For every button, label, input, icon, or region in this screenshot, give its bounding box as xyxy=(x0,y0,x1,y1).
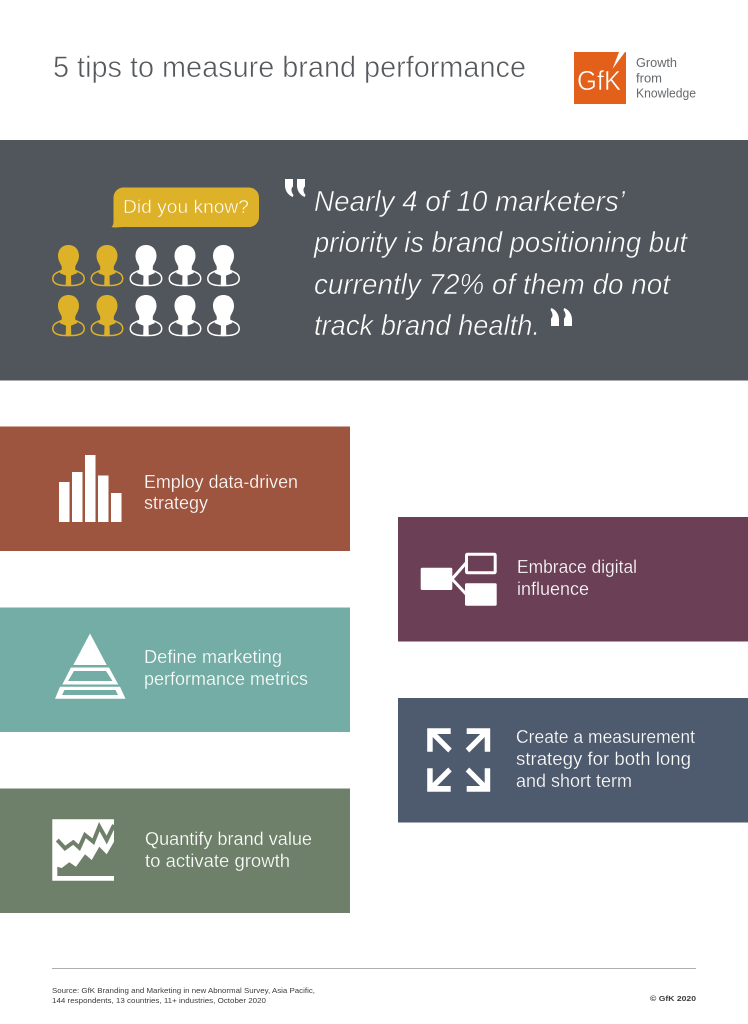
icon: pyramid xyxy=(55,634,126,699)
panel: did you know banner xyxy=(0,140,748,380)
panel: define marketing performance metrics xyxy=(0,608,350,732)
tip text xyxy=(517,557,637,599)
tip text: and short term xyxy=(516,771,632,791)
speech bubble: did you know: Did you know? xyxy=(123,197,249,217)
panel: employ data-driven strategy xyxy=(0,426,350,551)
source note xyxy=(52,986,315,1005)
panel: quantify brand value xyxy=(0,788,350,913)
panel: embrace digital influence xyxy=(398,517,748,642)
logo tagline: Knowledge xyxy=(636,86,696,100)
logo tagline: Growth xyxy=(636,56,677,70)
quote text: priority is brand positioning but xyxy=(313,227,689,259)
source note: Source: GfK Branding and Marketing in new Abnormal Survey, Asia Pacific, xyxy=(52,986,315,995)
tip text xyxy=(144,647,308,689)
tip text: Employ data-driven xyxy=(144,472,298,492)
tip text: performance metrics xyxy=(144,669,308,689)
panel: create a measurement strategy xyxy=(398,698,748,822)
tip text xyxy=(516,727,695,791)
quote text: currently 72% of them do not xyxy=(314,269,672,301)
tip text xyxy=(144,472,298,513)
copyright: © GfK 2020 xyxy=(650,994,696,1003)
speech bubble: did you know xyxy=(112,188,259,227)
quote text xyxy=(313,186,689,342)
quote text: track brand health. xyxy=(314,310,540,342)
icon: opening quotation mark xyxy=(285,179,306,197)
source note: 144 respondents, 13 countries, 11+ industries, October 2020 xyxy=(52,996,266,1005)
quote text: Nearly 4 of 10 marketers’ xyxy=(314,186,626,218)
title: 5 tips to measure brand performance xyxy=(53,51,526,84)
icon: bar chart xyxy=(59,455,122,522)
tip text xyxy=(145,829,312,871)
icon: four outward arrows xyxy=(427,728,490,792)
logo: GfK growth from knowledge xyxy=(574,52,696,104)
tip text: to activate growth xyxy=(145,851,290,871)
tip text: influence xyxy=(517,579,589,599)
people icons: 4 of 10 highlighted xyxy=(53,245,239,336)
tip text: Quantify brand value xyxy=(145,829,312,849)
logo tagline xyxy=(636,56,696,100)
tip text: strategy for both long xyxy=(516,749,691,769)
logo tagline: from xyxy=(636,72,662,86)
tip text: Create a measurement xyxy=(516,727,695,747)
tip text: Define marketing xyxy=(144,647,282,667)
logo mark: GfK xyxy=(577,65,621,96)
icon: closing quotation mark xyxy=(550,308,572,326)
icon: connected boxes xyxy=(421,554,497,606)
tip text: Embrace digital xyxy=(517,557,637,577)
tip text: strategy xyxy=(144,493,208,513)
icon: area line chart xyxy=(52,819,114,881)
